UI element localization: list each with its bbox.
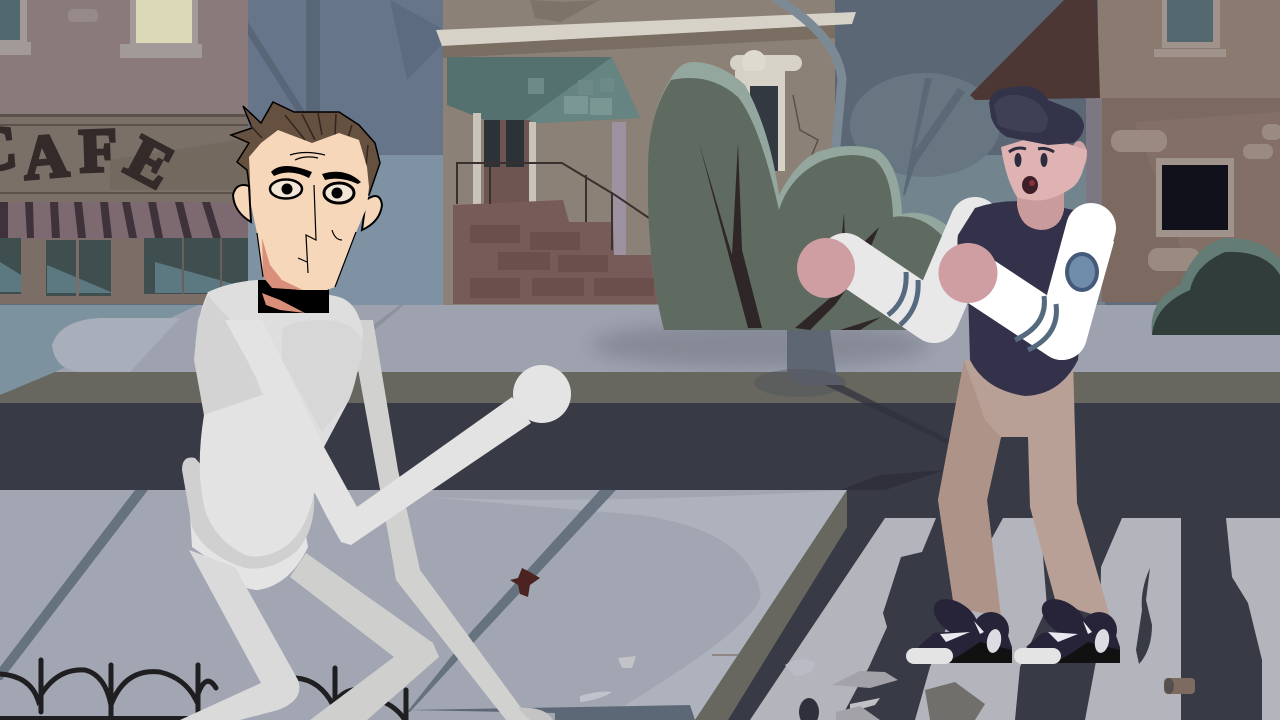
pavement cracks bbox=[0, 490, 695, 720]
pants bbox=[938, 360, 1111, 620]
brick steps bbox=[453, 200, 660, 304]
abdomen bbox=[200, 395, 324, 557]
elbow patch bbox=[1065, 252, 1099, 292]
white stick figure bbox=[180, 280, 571, 720]
left cafe building bbox=[0, 0, 248, 304]
right chest patch bbox=[282, 320, 363, 432]
nose and wrinkles bbox=[290, 152, 342, 273]
ears bbox=[233, 185, 382, 230]
window top left bbox=[0, 0, 31, 55]
hair bbox=[989, 86, 1084, 145]
curb and road bbox=[0, 372, 1280, 720]
right shoe bbox=[1014, 591, 1120, 664]
face bbox=[249, 130, 369, 290]
neck block bbox=[258, 280, 329, 313]
stair railing bbox=[457, 163, 649, 250]
roof cornice bbox=[436, 12, 856, 46]
cafe sign bbox=[0, 113, 184, 202]
lower sidewalk bbox=[0, 490, 847, 720]
upper sidewalk bbox=[0, 305, 1280, 395]
fist bbox=[513, 365, 571, 423]
ear bbox=[1071, 141, 1087, 169]
wall bricks bbox=[1111, 124, 1280, 271]
torso bbox=[957, 201, 1083, 396]
litter bbox=[510, 568, 1195, 720]
left shoe bbox=[906, 591, 1012, 664]
eyes bbox=[270, 180, 354, 203]
hair bbox=[231, 102, 380, 200]
dark window bbox=[1156, 158, 1234, 237]
near arm bbox=[938, 228, 1099, 350]
pelvis bbox=[190, 500, 308, 590]
large bush bbox=[648, 62, 954, 330]
cafe sign: A bbox=[20, 121, 71, 193]
upper window bbox=[1154, 0, 1226, 57]
sash belt bbox=[182, 458, 314, 569]
crosswalk stripes bbox=[750, 518, 1280, 720]
face bbox=[1001, 135, 1087, 200]
porch door bbox=[473, 113, 626, 257]
back leg bbox=[290, 553, 439, 720]
black iron railing bbox=[0, 660, 406, 720]
small bush right bbox=[1152, 238, 1280, 335]
far arm bbox=[797, 222, 975, 325]
right character bbox=[797, 86, 1120, 664]
street lamp pole bbox=[775, 0, 842, 190]
striped awning bbox=[0, 202, 248, 239]
house door frame bbox=[730, 50, 802, 171]
front leg bbox=[180, 550, 299, 720]
cartoon head bbox=[231, 102, 382, 313]
teal porch awning bbox=[447, 57, 640, 124]
foot shadow ellipse bbox=[518, 708, 553, 720]
jaw blush bbox=[262, 238, 303, 290]
back arm bbox=[349, 320, 530, 720]
neck skin bbox=[262, 293, 305, 313]
eyebrows bbox=[271, 166, 361, 184]
near arm cuffs bbox=[1015, 296, 1056, 350]
cafe sign: F bbox=[78, 116, 118, 186]
front arm bbox=[225, 320, 531, 545]
bush branches bbox=[699, 143, 881, 330]
far hand bbox=[797, 238, 855, 298]
right building bbox=[970, 0, 1280, 302]
sky backdrop bbox=[0, 0, 1280, 310]
roof bbox=[970, 0, 1100, 100]
lamp post base shadow bbox=[754, 330, 950, 490]
neck bbox=[1017, 190, 1064, 230]
far arm cuffs bbox=[888, 272, 918, 325]
lit window bbox=[120, 0, 202, 58]
left chest patch bbox=[194, 296, 262, 415]
facial features bbox=[1009, 148, 1054, 194]
middle house bbox=[436, 0, 856, 306]
chest bbox=[195, 280, 363, 460]
near hand bbox=[938, 243, 998, 303]
cafe sign: E bbox=[116, 123, 184, 202]
cafe windows bbox=[0, 238, 248, 296]
